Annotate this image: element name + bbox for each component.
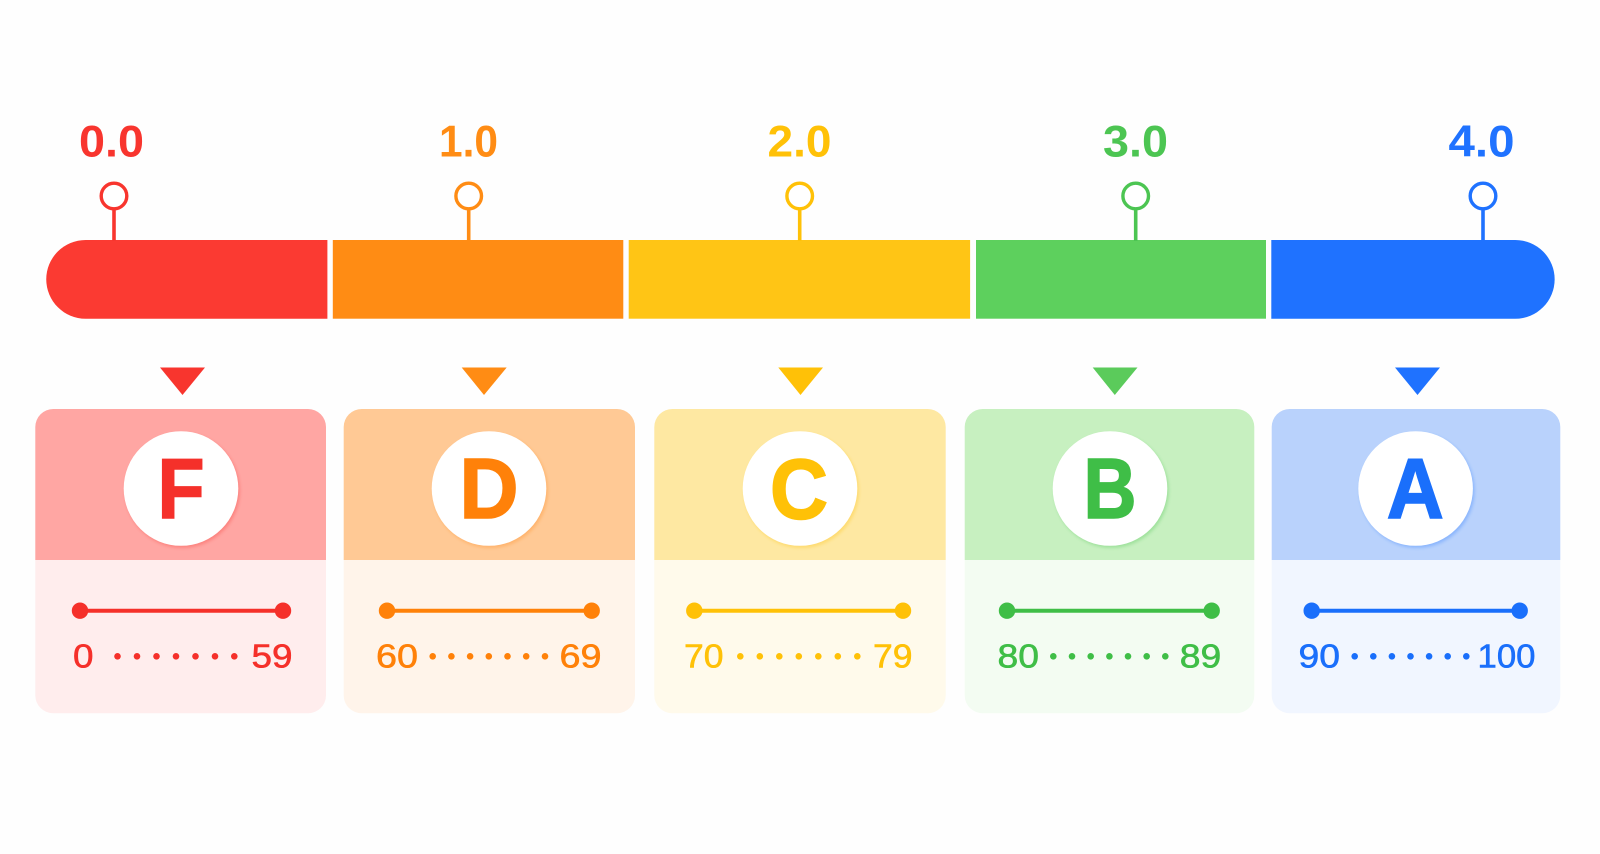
card header [654,409,946,560]
bar segment: F red [46,240,327,319]
range slider [72,602,291,619]
grade badge [1053,431,1169,548]
card header [965,409,1254,560]
panel: grade C [654,409,946,713]
range slider [1304,602,1528,619]
dotted connector [1351,653,1470,660]
dotted connector [429,653,548,660]
range values: 0 [73,638,94,676]
range values [1298,638,1536,676]
marker: 0.0: 0.0 [79,118,144,166]
range values [998,638,1221,676]
grade badge: A [1387,442,1444,537]
range values [684,638,912,676]
panel: grade F [35,409,326,713]
marker: 3.0 [1103,118,1168,241]
card header [1272,409,1560,560]
bar segment: C yellow [629,240,970,319]
panel: grade A [1272,409,1560,713]
marker: 0.0 [79,118,144,241]
marker: 4.0 [1448,118,1514,241]
range slider [379,602,600,619]
grade badge: B [1084,442,1136,537]
marker: 4.0: 4.0 [1448,118,1514,166]
card header [35,409,326,560]
card body [965,560,1254,713]
range values: 70 [684,638,724,676]
range values: 89 [1180,638,1221,676]
bar segment: A blue [1271,240,1555,319]
range values: 100 [1478,638,1536,676]
marker: 1.0 [439,118,498,241]
range values [73,638,292,676]
range slider [999,602,1220,619]
arrow: F [160,368,205,395]
marker: 2.0: 2.0 [768,118,832,166]
GPA scale bar [46,240,1555,319]
bar segment: D orange [333,240,623,319]
arrow: D [462,368,507,395]
panel: grade B [965,409,1254,713]
marker: 3.0: 3.0 [1103,118,1168,166]
dotted connector [114,653,238,660]
grade badge [743,431,859,548]
card body [344,560,635,713]
grade badge: C [770,442,828,538]
card body [1272,560,1560,713]
range values [376,638,602,676]
card body [35,560,326,713]
range values: 59 [252,638,292,676]
marker: 1.0: 1.0 [439,118,498,166]
grade badge: F [158,442,204,537]
dotted connector [1050,653,1169,660]
card header [344,409,635,560]
range values: 60 [376,638,418,676]
marker: 2.0 [768,118,832,241]
range values: 79 [873,638,912,676]
bar segment: B green [976,240,1266,319]
arrow: A [1395,368,1440,395]
range values: 90 [1298,638,1340,676]
range values: 80 [998,638,1039,676]
arrow: C [778,368,823,395]
panel: grade D [344,409,635,713]
range slider [686,602,911,619]
arrow: B [1093,368,1138,395]
grade badge: D [460,442,518,537]
grade badge [1358,431,1474,548]
grade badge [124,431,240,548]
card body [654,560,946,713]
dotted connector [737,653,861,660]
range values: 69 [560,638,602,676]
grade badge [432,431,548,548]
